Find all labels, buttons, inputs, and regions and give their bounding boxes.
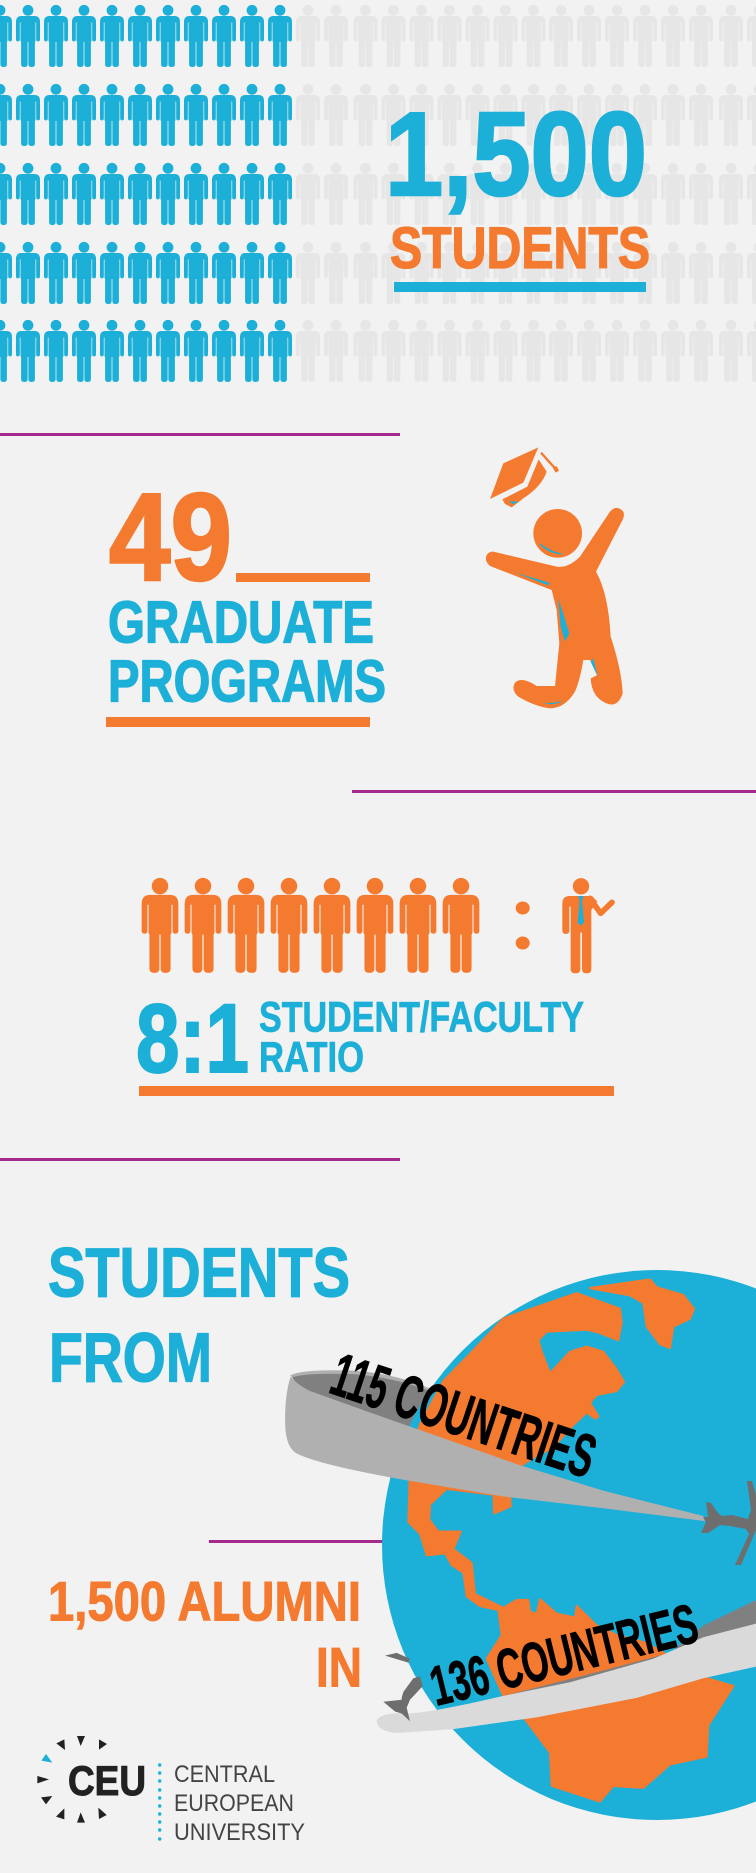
- heading: 1,500 alumni in: [48, 1570, 362, 1698]
- label: students: STUDENTS: [390, 216, 650, 281]
- label: programs: PROGRAMS: [108, 648, 386, 714]
- globe: [382, 1270, 756, 1820]
- underline: [394, 282, 646, 292]
- logo wordmark: UNIVERSITY: [174, 1819, 305, 1846]
- ribbon: back of upper flight path: [290, 1370, 537, 1495]
- shading: [515, 544, 598, 704]
- icon: mortarboard: [490, 447, 559, 507]
- logo mark: triangle ring: [37, 1736, 107, 1823]
- stat: 49 graduate programs: [106, 469, 386, 727]
- underline: [139, 1086, 614, 1096]
- icon: faculty member: [562, 878, 612, 973]
- illustration: globe with flight paths: [285, 1270, 756, 1820]
- heading: 1,500 alumni in: 1,500 ALUMNI: [48, 1570, 361, 1632]
- heading: students from: FROM: [49, 1318, 212, 1396]
- logo wordmark: CENTRAL: [174, 1761, 275, 1788]
- underline: [106, 717, 370, 727]
- pictogram: eight students: [142, 878, 479, 973]
- logo wordmark: [174, 1761, 305, 1846]
- heading: 1,500 alumni in: IN: [316, 1636, 362, 1698]
- number: 1,500: 1,500: [385, 88, 647, 221]
- label: ratio: RATIO: [259, 1034, 364, 1082]
- icon: airplane left: [383, 1653, 423, 1721]
- number underline: [236, 573, 370, 582]
- heading: students from: STUDENTS: [48, 1234, 350, 1312]
- ribbon: lower flight path: [377, 1600, 756, 1733]
- icon: airplane right: [701, 1481, 756, 1565]
- pictogram: blue people: [0, 5, 292, 382]
- logo: CEU: [37, 1736, 305, 1846]
- label: student/faculty: STUDENT/FACULTY: [259, 994, 584, 1042]
- heading: students from: [48, 1234, 350, 1396]
- head: [533, 509, 582, 558]
- stat: 1,500 students: [385, 88, 650, 292]
- dotted divider: [158, 1763, 161, 1841]
- icon: jumping graduate: [486, 447, 624, 708]
- number: 8:1: 8:1: [136, 984, 249, 1093]
- label: graduate: GRADUATE: [108, 590, 374, 656]
- logo letters: CEU: [68, 1757, 146, 1804]
- logo wordmark: EUROPEAN: [174, 1790, 294, 1817]
- ribbon: upper flight path: [285, 1376, 705, 1521]
- pictogram: gray people background: [296, 5, 756, 382]
- number: 49: 49: [109, 469, 232, 607]
- colon separator: [516, 902, 530, 950]
- body: [486, 508, 624, 708]
- stat: 8:1 ratio: [136, 984, 614, 1096]
- continents: [408, 1280, 733, 1801]
